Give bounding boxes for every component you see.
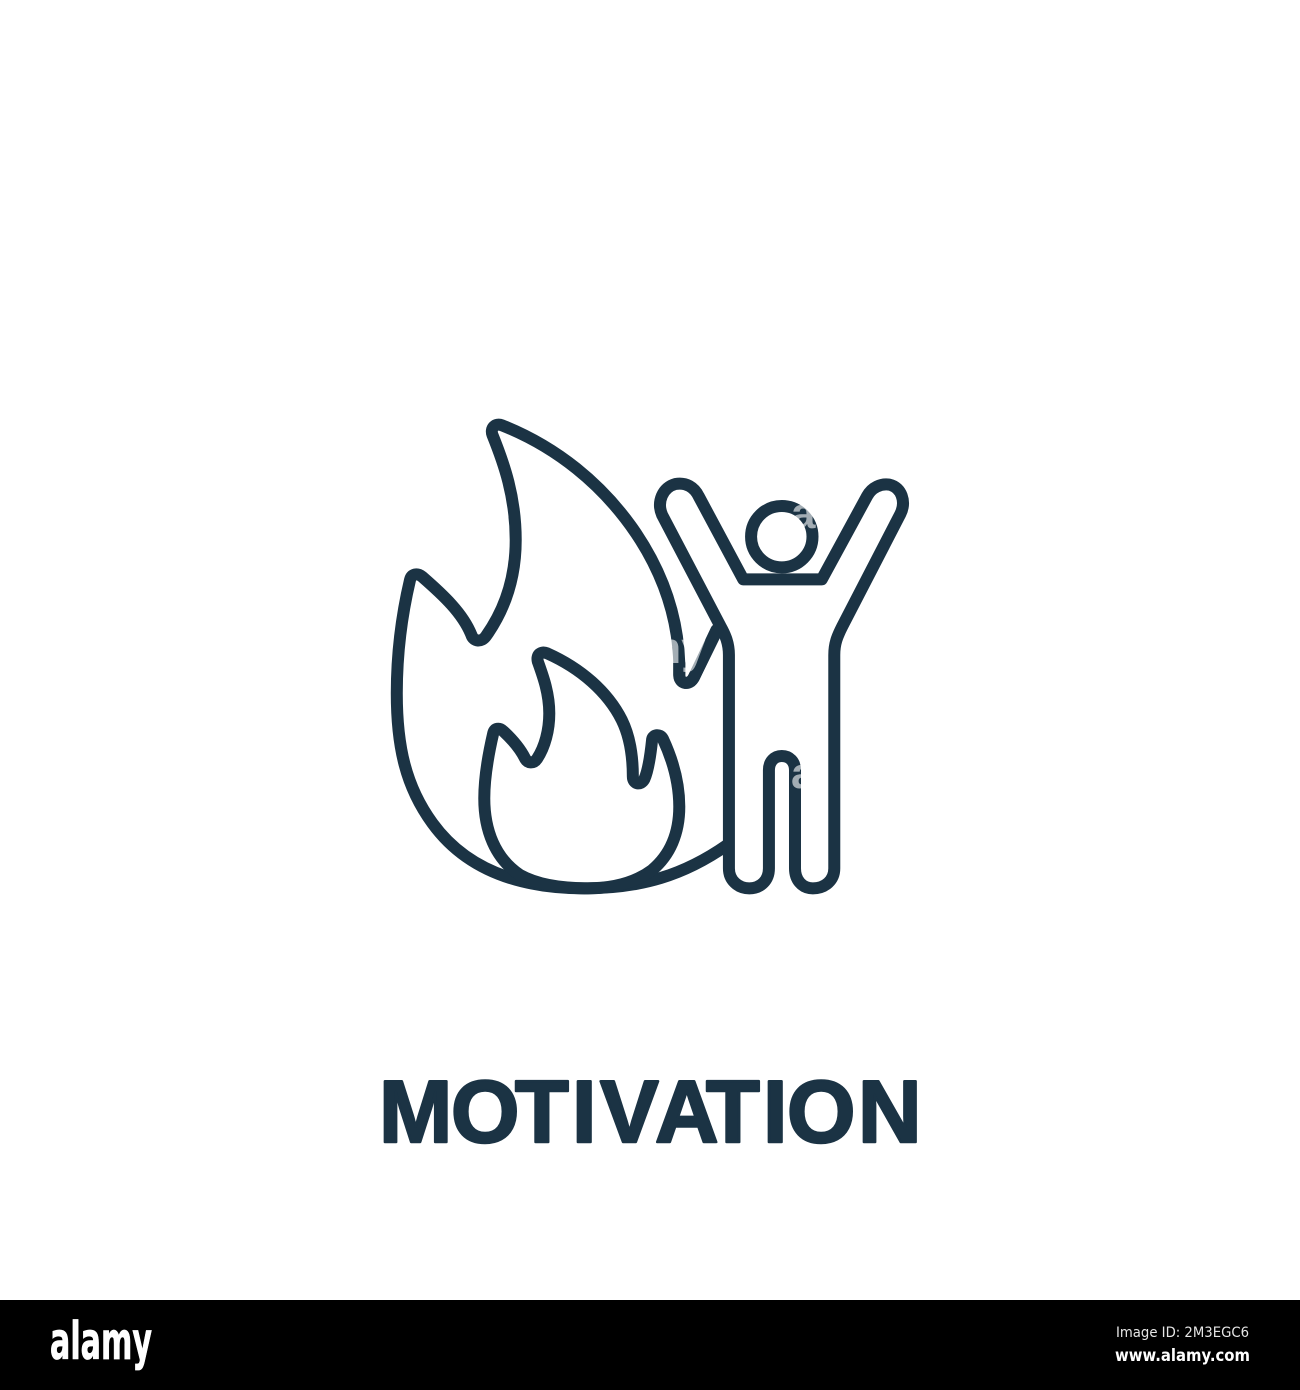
icon: flame edge at arm — [679, 630, 717, 683]
watermark fragments: a — [791, 749, 816, 798]
image id: Image ID: 2M3EGC6 — [1116, 1325, 1249, 1341]
icon: motivation flame and person — [397, 425, 903, 888]
icon: large flame — [397, 425, 727, 888]
watermark fragments — [642, 489, 816, 798]
title: MOTIVATION — [379, 1062, 922, 1161]
footer bar — [0, 1300, 1300, 1390]
website: www.alamy.com — [1115, 1346, 1250, 1366]
icon: small flame — [484, 653, 679, 888]
footer logo: alamy — [50, 1312, 152, 1372]
watermark fragments: my — [642, 624, 706, 673]
watermark fragments: a — [791, 489, 816, 538]
icon: person head — [751, 506, 812, 567]
icon: person body — [660, 484, 903, 888]
